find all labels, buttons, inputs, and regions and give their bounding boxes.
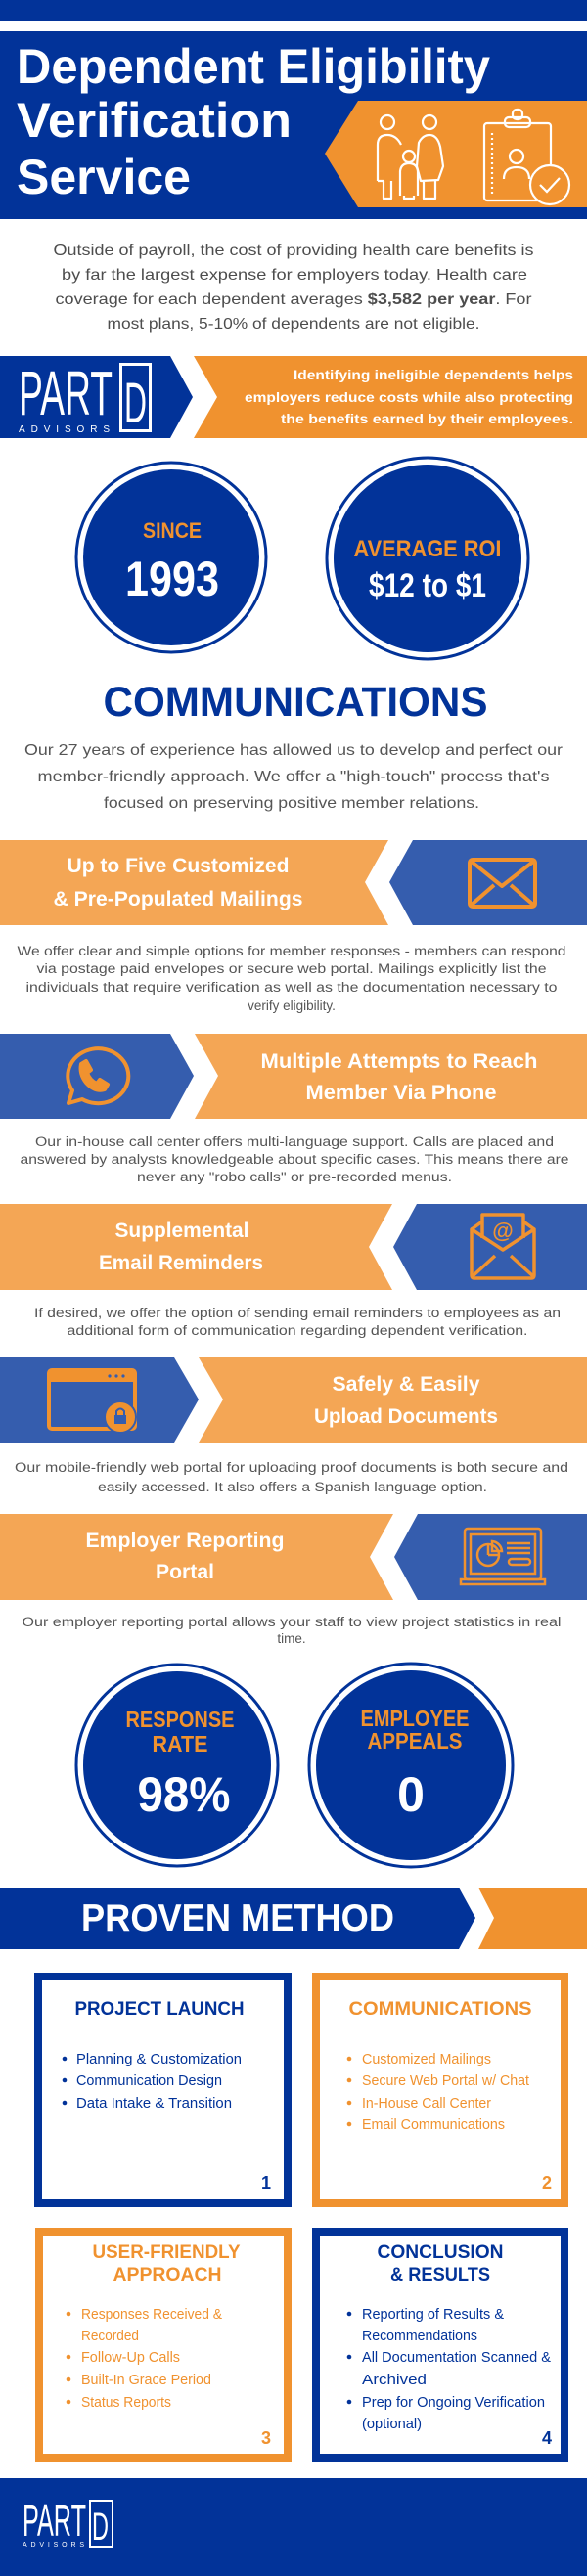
heading band: proven method: PROVEN METHOD	[81, 1897, 394, 1939]
phone title	[260, 1050, 538, 1104]
text: reporting description: time.	[277, 1631, 306, 1646]
stat circle: since 1993: SINCE	[143, 518, 202, 543]
communications intro text	[24, 742, 564, 812]
box: communications: Customized Mailings	[362, 2052, 491, 2067]
text: reporting description	[22, 1615, 562, 1646]
box: project launch	[38, 1976, 288, 2203]
text: email description: additional form of communication regarding dependent verification.	[67, 1323, 528, 1338]
icon: open email: @	[492, 1219, 514, 1243]
stat circle: average roi	[327, 458, 528, 659]
intro text: most plans, 5-10% of dependents are not eligible.	[108, 316, 479, 333]
text: mailings description	[18, 944, 565, 1013]
title: Dependent Eligibility	[17, 39, 490, 94]
panel: upload documents	[0, 1357, 587, 1443]
icon: clipboard with check	[484, 110, 569, 204]
box: conclusion & results: Archived	[362, 2373, 427, 2388]
box: communications: 2	[542, 2173, 552, 2193]
title: Verification	[17, 93, 292, 148]
box: user-friendly approach: Follow-Up Calls	[81, 2350, 180, 2366]
box: user-friendly approach: USER-FRIENDLY	[92, 2243, 241, 2263]
statement text: Identifying ineligible dependents helps	[294, 367, 573, 382]
statement text: employers reduce costs while also protecting	[245, 389, 573, 405]
logo: PART	[19, 358, 113, 428]
icon: laptop report	[461, 1529, 545, 1584]
stat circle: response rate: 98%	[137, 1767, 231, 1822]
box: conclusion & results: All Documentation Scanned &	[362, 2350, 551, 2366]
upload title: Upload Documents	[314, 1405, 498, 1428]
box: conclusion & results: Reporting of Results &	[362, 2307, 504, 2323]
stat circle: employee appeals	[309, 1664, 513, 1867]
phone title: Multiple Attempts to Reach	[260, 1050, 538, 1073]
footer	[0, 2478, 587, 2576]
text: reporting description: Our employer reporting portal allows your staff to view project statistics in real	[22, 1615, 562, 1629]
box: user-friendly approach: APPROACH	[113, 2265, 221, 2286]
box: conclusion & results	[316, 2232, 564, 2458]
box: communications: Secure Web Portal w/ Chat	[362, 2073, 529, 2089]
text: upload description: Our mobile-friendly web portal for uploading proof documents is both secure and	[15, 1460, 568, 1475]
box: communications: In-House Call Center	[362, 2096, 491, 2111]
box: user-friendly approach: Built-In Grace Period	[81, 2373, 211, 2388]
icon: phone bubble	[68, 1048, 128, 1103]
upload title: Safely & Easily	[333, 1373, 480, 1396]
mailings title: & Pre-Populated Mailings	[53, 888, 303, 910]
footer logo: D	[92, 2506, 109, 2549]
intro text: coverage for each dependent averages $3,582 per year . For	[55, 291, 532, 308]
panel: email reminders	[0, 1204, 587, 1290]
box: project launch: 1	[261, 2173, 271, 2193]
intro text: Outside of payroll, the cost of providing health care benefits is	[53, 243, 534, 259]
logo: D	[124, 372, 147, 435]
title	[17, 39, 490, 204]
email title: Email Reminders	[99, 1252, 263, 1274]
text: phone description	[20, 1134, 569, 1184]
reporting title: Portal	[156, 1561, 214, 1583]
box: user-friendly approach: 3	[261, 2428, 271, 2448]
communications intro text: member-friendly approach. We offer a "high-touch" process that's	[37, 769, 550, 785]
intro text	[53, 243, 534, 333]
text: mailings description: individuals that require verification as well as the documentation necessary to	[25, 980, 558, 995]
stat circle: employee appeals: 0	[397, 1767, 425, 1822]
email title	[99, 1220, 263, 1274]
box: communications	[316, 1976, 564, 2203]
footer logo: PART	[23, 2495, 86, 2546]
box: user-friendly approach: Recorded	[81, 2329, 139, 2344]
footer logo: ADVISORS	[23, 2542, 84, 2549]
heading band: proven method	[0, 1888, 587, 1949]
text: upload description	[15, 1460, 568, 1494]
mailings title: Up to Five Customized	[67, 855, 290, 877]
box: communications: Email Communications	[362, 2117, 505, 2133]
text: phone description: answered by analysts knowledgeable about specific cases. This means there are	[20, 1152, 569, 1167]
statement text: the benefits earned by their employees.	[281, 411, 573, 426]
text: mailings description: via postage paid envelopes or secure web portal. Mailings explicitly list the	[37, 961, 546, 976]
box: project launch: Communication Design	[76, 2073, 222, 2089]
title: Service	[17, 150, 191, 204]
logo: ADVISORS	[19, 424, 110, 435]
text: upload description: easily accessed. It also offers a Spanish language option.	[98, 1480, 487, 1494]
box: user-friendly approach: Responses Received &	[81, 2307, 222, 2323]
phone title: Member Via Phone	[305, 1082, 497, 1104]
box: conclusion & results: Prep for Ongoing Verification	[362, 2395, 545, 2411]
icon: open email	[472, 1215, 534, 1278]
header panel	[0, 31, 587, 219]
stat circle: employee appeals: EMPLOYEE	[360, 1706, 470, 1731]
icon: envelope	[470, 860, 535, 907]
text: mailings description: We offer clear and simple options for member responses - members can respond	[18, 944, 565, 958]
panel: mailings	[0, 840, 587, 925]
stat circle: response rate: RATE	[153, 1731, 207, 1756]
panel: phone	[0, 1034, 587, 1119]
communications intro text: Our 27 years of experience has allowed us to develop and perfect our	[24, 742, 564, 759]
box: project launch: Planning & Customization	[76, 2052, 242, 2067]
box: project launch: PROJECT LAUNCH	[74, 1999, 245, 2020]
communications intro text: focused on preserving positive member relations.	[104, 795, 479, 812]
heading: communications: COMMUNICATIONS	[104, 679, 487, 726]
panel: employer reporting	[0, 1514, 587, 1600]
stat circle: since 1993: 1993	[125, 552, 219, 606]
box: project launch: Data Intake & Transition	[76, 2096, 232, 2111]
icon: browser lock	[49, 1370, 136, 1433]
intro text: by far the largest expense for employers today. Health care	[62, 267, 527, 284]
top bar	[0, 0, 587, 21]
stat circle: average roi: $12 to $1	[369, 567, 486, 604]
text: phone description: never any "robo calls" or pre-recorded menus.	[137, 1170, 452, 1184]
banner: logo and statement	[0, 356, 587, 438]
icon: family	[378, 115, 443, 199]
text: mailings description: verify eligibility.	[248, 999, 336, 1013]
box: conclusion & results: Recommendations	[362, 2329, 477, 2344]
box: communications: COMMUNICATIONS	[348, 1999, 532, 2020]
stat circle: employee appeals: APPEALS	[368, 1728, 462, 1754]
box: user-friendly approach: Status Reports	[81, 2395, 171, 2411]
upload title	[314, 1373, 498, 1428]
reporting title: Employer Reporting	[86, 1530, 284, 1552]
text: phone description: Our in-house call center offers multi-language support. Calls are placed and	[35, 1134, 554, 1149]
box: user-friendly approach	[39, 2232, 288, 2458]
stat circle: since 1993	[76, 463, 266, 652]
text: email description: If desired, we offer the option of sending email reminders to employees as an	[34, 1306, 561, 1320]
box: conclusion & results: (optional)	[362, 2417, 422, 2432]
reporting title	[86, 1530, 284, 1583]
box: conclusion & results: & RESULTS	[390, 2265, 490, 2286]
statement text	[245, 367, 573, 426]
box: conclusion & results: CONCLUSION	[378, 2243, 503, 2263]
stat circle: average roi: AVERAGE ROI	[354, 536, 501, 562]
mailings title	[53, 855, 303, 910]
stat circle: response rate	[76, 1665, 278, 1866]
stat circle: response rate: RESPONSE	[125, 1707, 235, 1732]
text: email description	[34, 1306, 561, 1338]
email title: Supplemental	[115, 1220, 248, 1242]
box: conclusion & results: 4	[542, 2428, 552, 2448]
